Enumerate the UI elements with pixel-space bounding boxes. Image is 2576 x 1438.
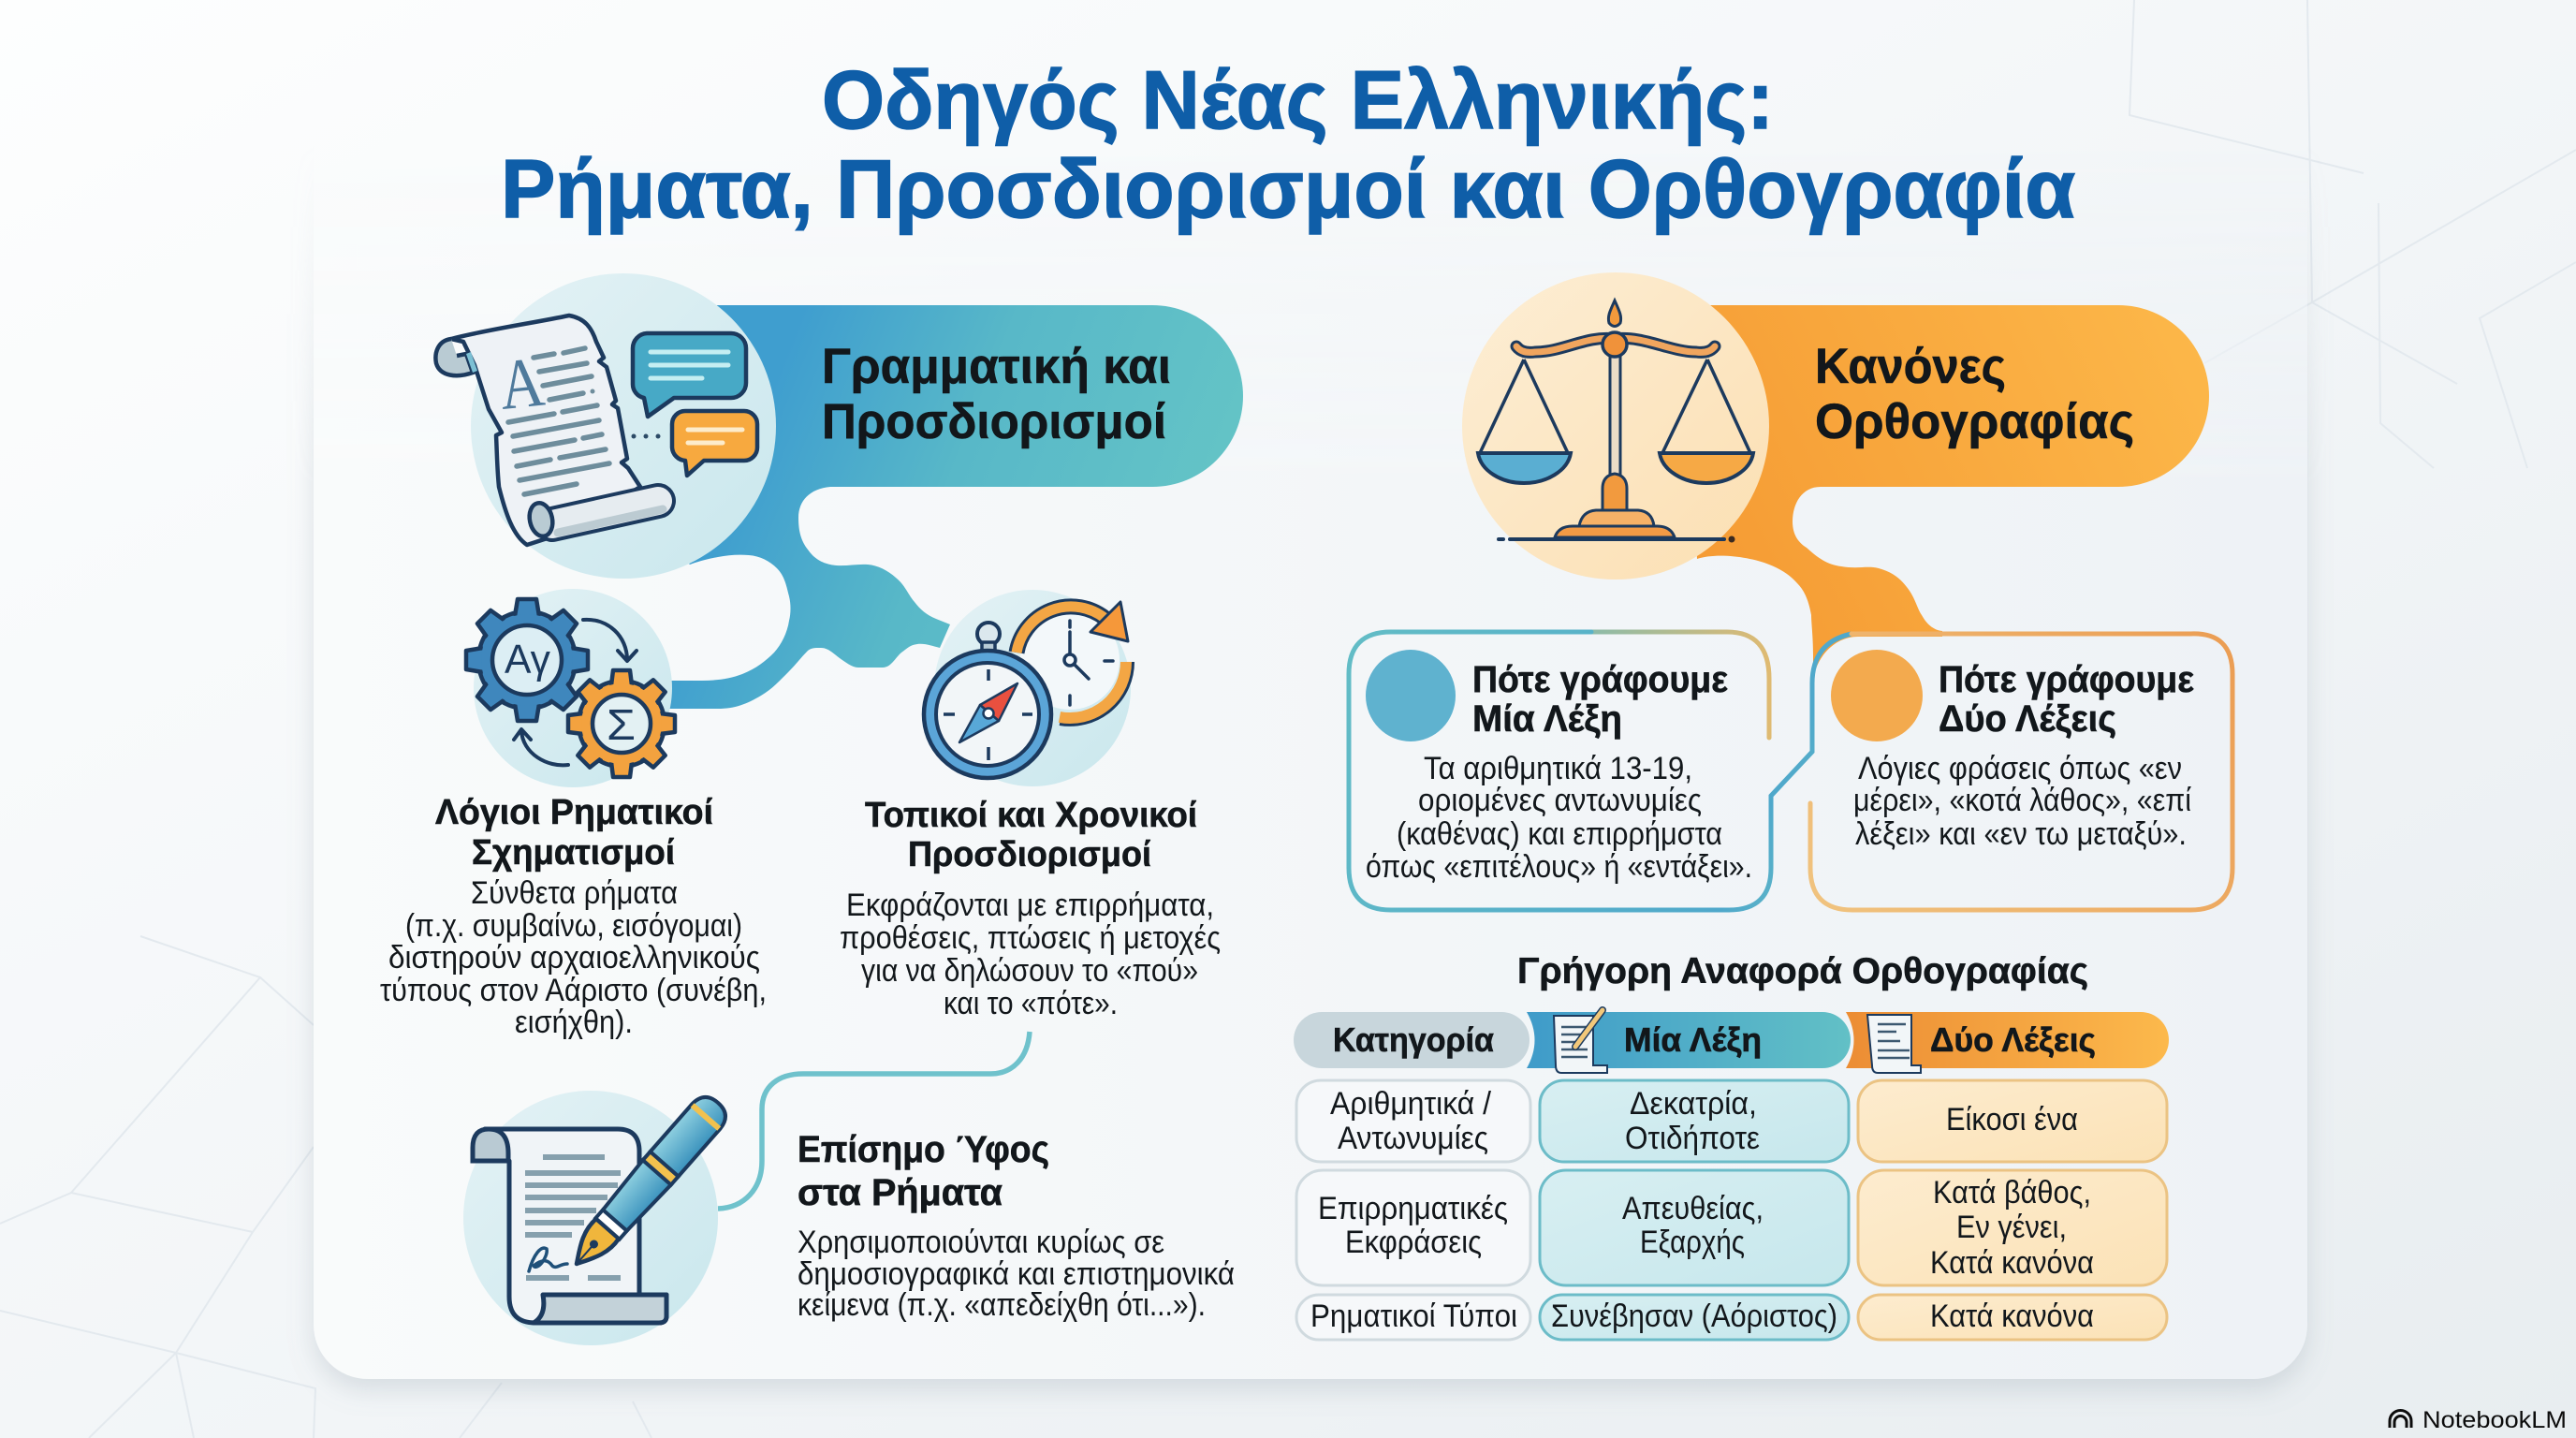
heading: spelling rules: Ορθογραφίας bbox=[1815, 394, 2134, 449]
section: local and temporal modifiers: Προσδιορισμοί bbox=[908, 835, 1151, 874]
panel: when we write two words: μέρει», «κοτά λάθος», «επί bbox=[1853, 783, 2191, 818]
title: Οδηγός Νέας Ελληνικής: bbox=[822, 53, 1774, 146]
heading: grammar: Προσδιορισμοί bbox=[822, 394, 1166, 449]
icon: scroll with chat bubbles bbox=[435, 273, 776, 579]
panel: when we write two words: Λόγιες φράσεις όπως «εν bbox=[1858, 751, 2182, 786]
table row: verb forms: Κατά κανόνα bbox=[1930, 1299, 2094, 1334]
icon: gears bbox=[466, 589, 675, 787]
section: verbal formations: διστηρούν αρχαιοελληνικούς bbox=[388, 940, 760, 976]
panel: spelling rules connector blob bbox=[1685, 305, 2209, 683]
section: local and temporal modifiers: Εκφράζονται με επιρρήματα, bbox=[846, 888, 1214, 923]
panel: when we write one word: Μία Λέξη bbox=[1472, 698, 1622, 740]
icon: compass and clock bbox=[924, 590, 1133, 786]
section: formal style in verbs: κείμενα (π.χ. «απεδείχθη ότι...»). bbox=[798, 1287, 1206, 1323]
section: local and temporal modifiers: για να δηλώσουν το «πού» bbox=[861, 953, 1198, 989]
panel: when we write one word: Τα αριθμητικά 13-19, bbox=[1424, 751, 1692, 786]
title: Ρήματα, Προσδιορισμοί και Ορθογραφία bbox=[501, 142, 2075, 235]
panel: when we write one word: Πότε γράφουμε bbox=[1472, 659, 1728, 700]
icon: document and fountain pen bbox=[463, 1091, 732, 1345]
connector line to formal style bbox=[718, 1032, 1030, 1209]
table row: numerals and pronouns bbox=[1296, 1080, 2167, 1162]
table header: category bbox=[1294, 1012, 1530, 1068]
table row: adverbial expressions: Εκφράσεις bbox=[1345, 1225, 1482, 1260]
section: formal style in verbs: δημοσιογραφικά και επιστημονικά bbox=[798, 1256, 1235, 1292]
table title: Γρήγορη Αναφορά Ορθογραφίας bbox=[1517, 951, 2088, 991]
section: verbal formations: (π.χ. συμβαίνω, εισόγομαι) bbox=[405, 908, 742, 944]
section: formal style in verbs: Επίσημο Ύφος bbox=[798, 1129, 1049, 1170]
table row: adverbial expressions: Επιρρηματικές bbox=[1318, 1191, 1508, 1226]
icon: scroll with chat bubbles: A bbox=[496, 343, 548, 425]
panel: when we write two words bbox=[1831, 650, 2194, 852]
section: local and temporal modifiers bbox=[840, 796, 1221, 1021]
table header: one word: Μία Λέξη bbox=[1624, 1020, 1762, 1059]
heading: grammar bbox=[822, 339, 1171, 449]
icon: gears: Σ bbox=[607, 700, 636, 749]
table row: adverbial expressions: Εν γένει, bbox=[1956, 1210, 2067, 1245]
box outlines: one word / two words bbox=[1349, 632, 2232, 910]
panel: when we write two words: λέξει» και «εν τω μεταξύ». bbox=[1855, 816, 2187, 852]
table header: category: Κατηγορία bbox=[1333, 1020, 1494, 1059]
section: verbal formations: εισήχθη). bbox=[515, 1005, 633, 1040]
table row: adverbial expressions: Απευθείας, bbox=[1622, 1191, 1764, 1226]
panel: when we write two words: Πότε γράφουμε bbox=[1939, 659, 2194, 700]
section: formal style in verbs bbox=[798, 1129, 1235, 1323]
table row: adverbial expressions bbox=[1296, 1170, 2167, 1285]
NotebookLM logo: NotebookLM bbox=[2422, 1407, 2567, 1433]
table header: one word bbox=[1527, 1010, 1851, 1073]
section: verbal formations: Λόγιοι Ρηματικοί bbox=[435, 793, 713, 832]
section: verbal formations: τύπους στον Αάριστο (συνέβη, bbox=[380, 973, 767, 1008]
table row: adverbial expressions: Κατά βάθος, bbox=[1933, 1175, 2091, 1211]
panel: when we write one word: όπως «επιτέλους» ή «εντάξει». bbox=[1366, 849, 1752, 885]
panel: when we write one word: (καθένας) και επιρρήμστα bbox=[1397, 816, 1722, 852]
section: verbal formations bbox=[380, 793, 767, 1040]
table row: verb forms bbox=[1296, 1295, 2167, 1340]
table row: adverbial expressions: Κατά κανόνα bbox=[1930, 1245, 2094, 1281]
title bbox=[501, 53, 2075, 235]
icon: gears: Αγ bbox=[505, 637, 550, 682]
section: verbal formations: Σύνθετα ρήματα bbox=[471, 875, 678, 911]
section: formal style in verbs: στα Ρήματα bbox=[798, 1172, 1003, 1213]
main panel bbox=[307, 324, 2314, 1397]
section: verbal formations: Σχηματισμοί bbox=[472, 833, 675, 873]
section: local and temporal modifiers: Τοπικοί και Χρονικοί bbox=[865, 796, 1197, 835]
table: quick spelling reference bbox=[1294, 1010, 2169, 1340]
section: formal style in verbs: Χρησιμοποιούνται κυρίως σε bbox=[798, 1225, 1164, 1260]
section: local and temporal modifiers: και το «πότε». bbox=[944, 986, 1118, 1021]
panel: when we write one word: οριομένες αντωνυμίες bbox=[1418, 783, 1702, 818]
table row: adverbial expressions: Εξαρχής bbox=[1640, 1225, 1745, 1260]
heading: spelling rules: Κανόνες bbox=[1815, 339, 2006, 394]
panel: when we write one word bbox=[1366, 650, 1752, 885]
heading: grammar: Γραμματική και bbox=[822, 339, 1171, 394]
icon: balance scale bbox=[1462, 272, 1769, 580]
table row: numerals and pronouns: Αριθμητικά / bbox=[1330, 1086, 1492, 1122]
table header: two words bbox=[1846, 1012, 2169, 1073]
table row: numerals and pronouns: Είκοσι ένα bbox=[1946, 1102, 2078, 1137]
table row: verb forms: Συνέβησαν (Αόριστος) bbox=[1551, 1299, 1837, 1334]
table row: verb forms: Ρηματικοί Τύποι bbox=[1310, 1299, 1517, 1334]
table row: numerals and pronouns: Δεκατρία, bbox=[1630, 1086, 1757, 1122]
table header: two words: Δύο Λέξεις bbox=[1930, 1020, 2096, 1059]
heading: spelling rules bbox=[1815, 339, 2134, 449]
table row: numerals and pronouns: Αντωνυμίες bbox=[1338, 1121, 1488, 1156]
panel: when we write two words: Δύο Λέξεις bbox=[1939, 698, 2116, 740]
table row: numerals and pronouns: Οτιδήποτε bbox=[1625, 1121, 1760, 1156]
section: local and temporal modifiers: προθέσεις, πτώσεις ή μετοχές bbox=[840, 920, 1221, 956]
panel: grammar section connector blob bbox=[580, 305, 1243, 709]
